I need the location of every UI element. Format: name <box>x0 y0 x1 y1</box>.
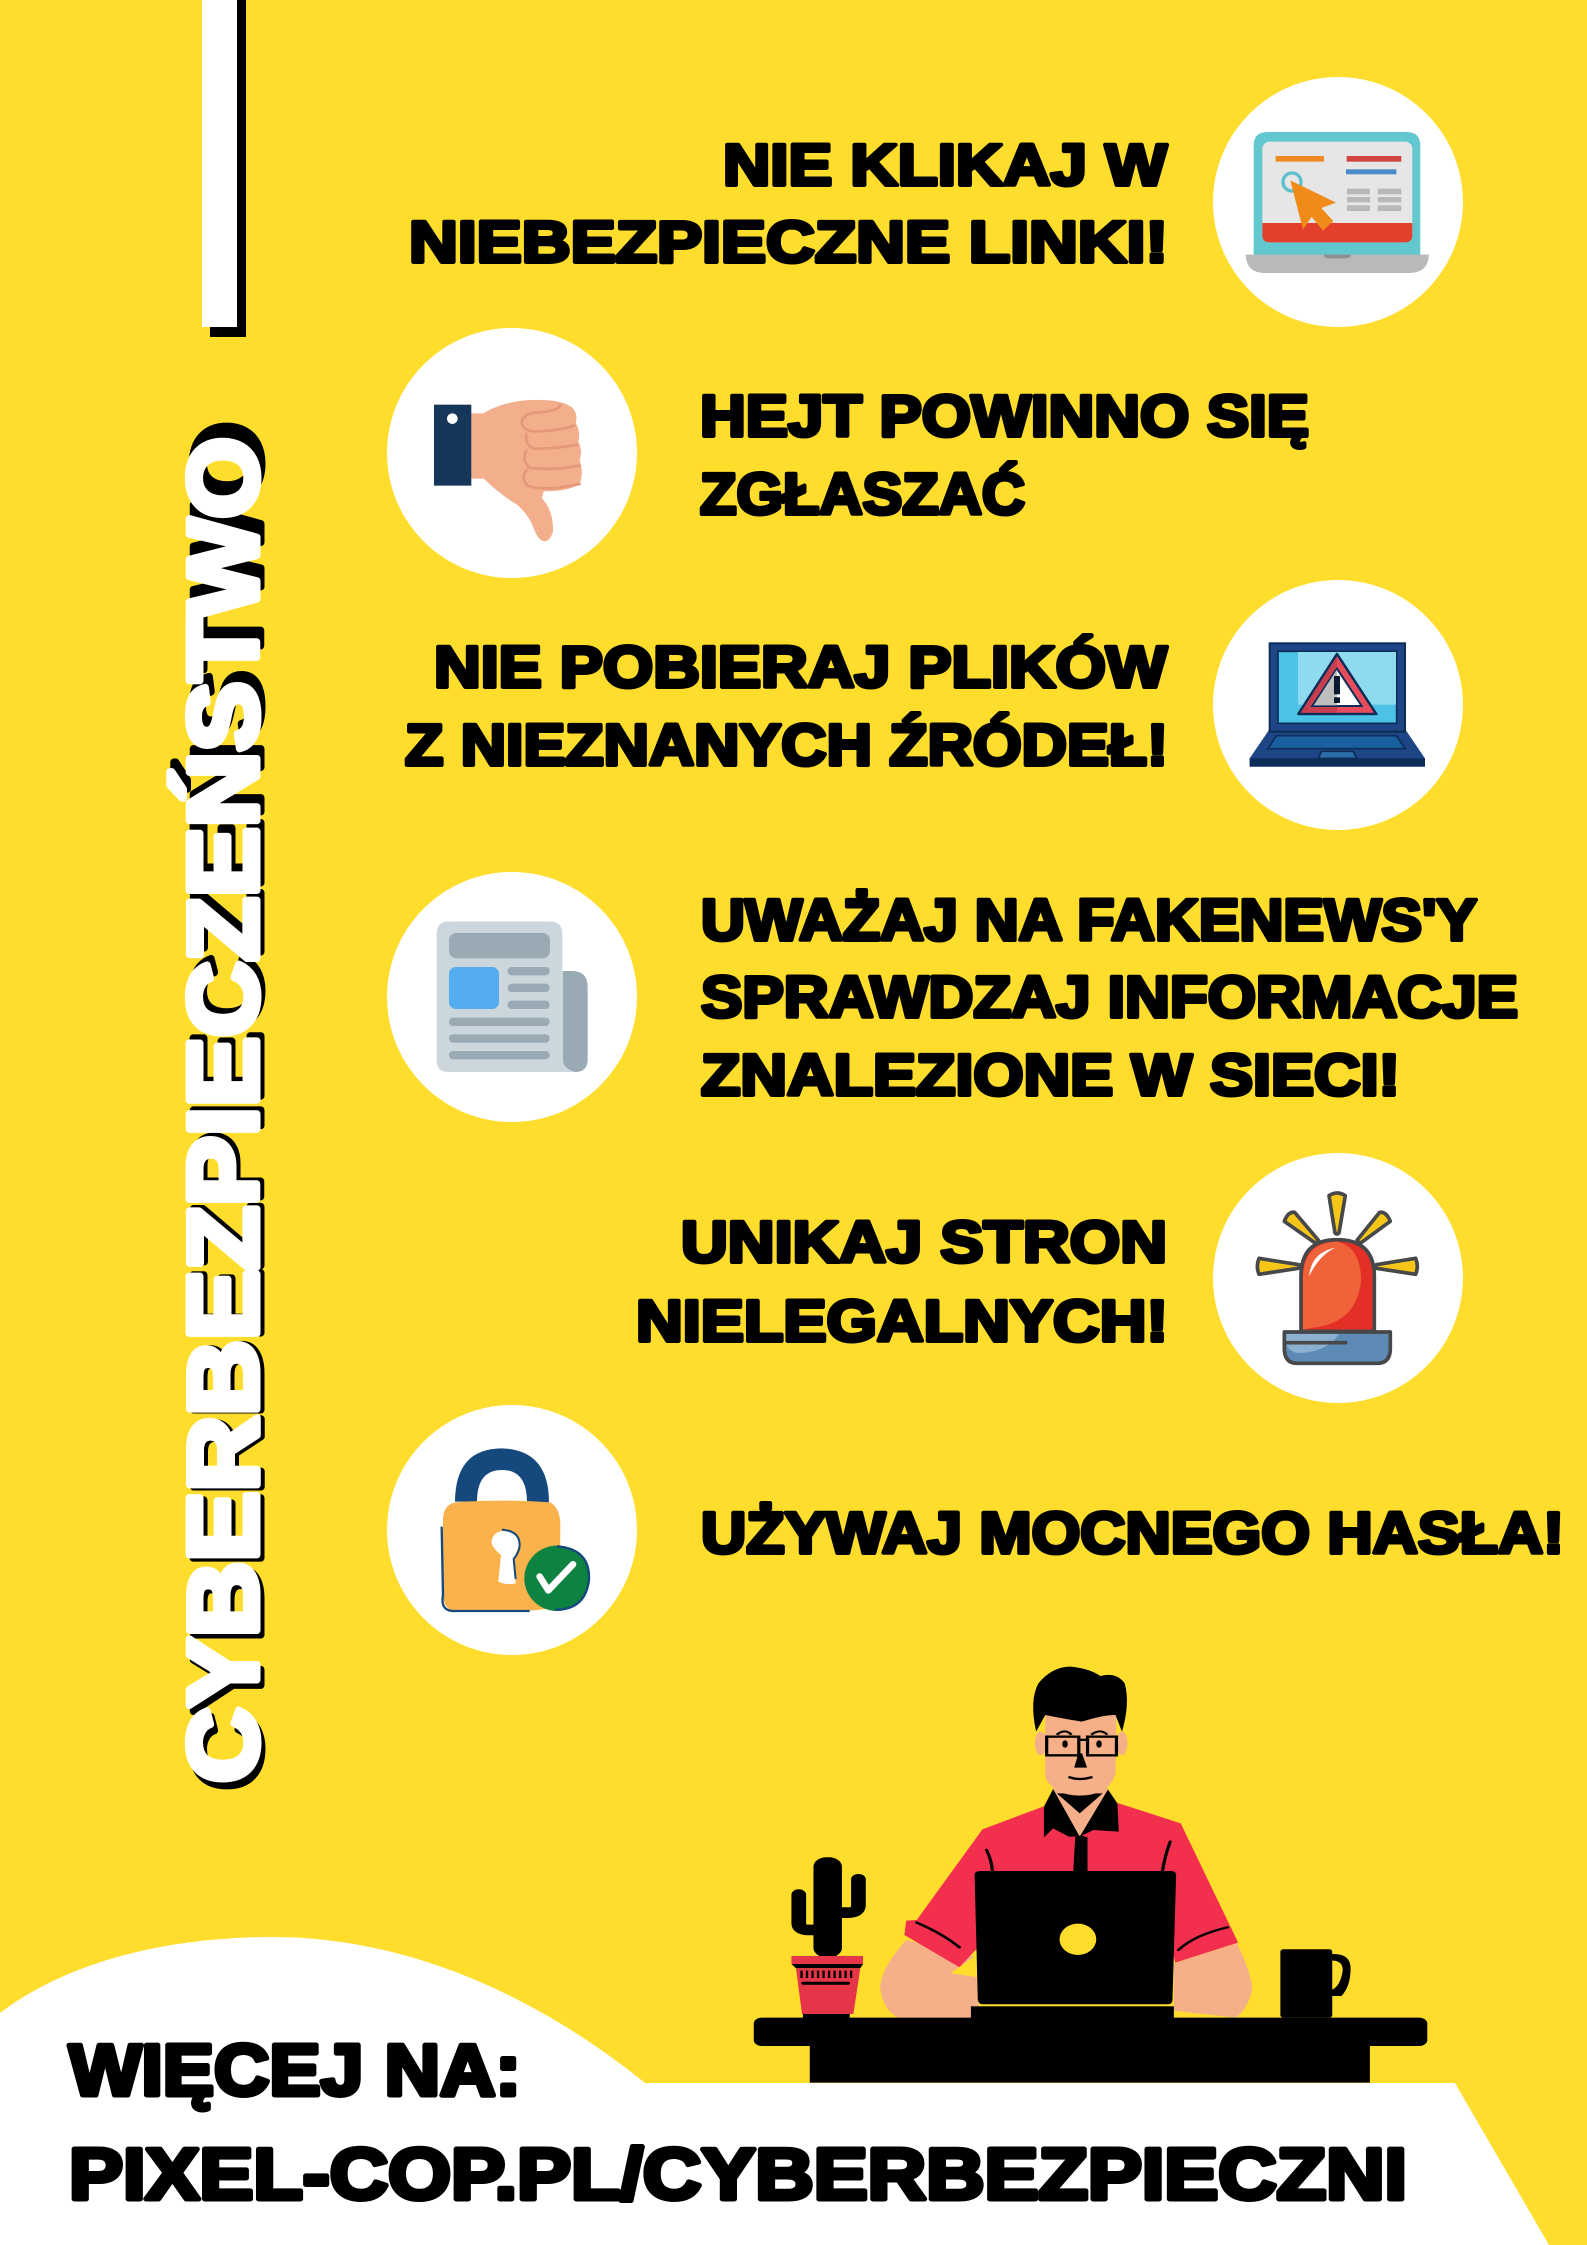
tip 4 text <box>701 888 1518 1108</box>
shirt creases <box>917 1842 1228 1950</box>
tip 5 text: UNIKAJ STRON <box>681 1210 1167 1275</box>
head <box>1033 1667 1127 1796</box>
tip 1 text: NIEBEZPIECZNE LINKI! <box>409 210 1168 275</box>
tip 3 text: Z NIEZNANYCH ŹRÓDEŁ! <box>405 713 1168 778</box>
tip 1 text: NIE KLIKAJ W <box>723 133 1167 198</box>
footer heading: WIĘCEJ NA: <box>69 2031 521 2111</box>
shirt <box>904 1803 1238 1967</box>
vertical title: CYBERBEZPIECZEŃSTWO <box>172 422 282 1790</box>
tip 3 text <box>405 635 1168 778</box>
tip 2 text: HEJT POWINNO SIĘ <box>700 384 1309 449</box>
tip 4 text: SPRAWDZAJ INFORMACJE <box>701 965 1518 1030</box>
laptop <box>971 1871 1176 2018</box>
icon: newspaper <box>387 872 637 1122</box>
arms <box>880 1940 1252 2018</box>
desk <box>754 2018 1427 2083</box>
tip 2 text <box>700 384 1309 527</box>
tip 4 text: ZNALEZIONE W SIECI! <box>701 1043 1400 1108</box>
tip 2 text: ZGŁASZAĆ <box>700 462 1025 527</box>
tip 6 text: UŻYWAJ MOCNEGO HASŁA! <box>701 1501 1564 1566</box>
tip 3 text: NIE POBIERAJ PLIKÓW <box>434 635 1167 700</box>
cactus in pot <box>791 1857 863 2018</box>
tip 4 text: UWAŻAJ NA FAKENEWS'Y <box>701 888 1477 953</box>
vertical title: CYBERBEZPIECZEŃSTWO <box>168 437 278 1783</box>
illustration: man at desk with laptop <box>754 1667 1427 2083</box>
tip 5 text <box>636 1210 1168 1354</box>
icon: alarm light <box>1213 1153 1463 1403</box>
icon: thumbs down <box>387 328 637 578</box>
collar and neck <box>1044 1788 1119 1872</box>
coffee mug <box>1280 1949 1351 2018</box>
icon: laptop warning <box>1213 580 1463 830</box>
tip 5 text: NIELEGALNYCH! <box>636 1289 1168 1354</box>
icon: laptop with cursor <box>1213 77 1463 327</box>
vertical white bar with black shadow <box>202 0 246 337</box>
footer url: PIXEL-COP.PL/CYBERBEZPIECZNI <box>69 2135 1407 2215</box>
icon: padlock with check <box>387 1405 637 1655</box>
footer white shape <box>0 1937 1549 2245</box>
tip 1 text <box>409 133 1168 275</box>
